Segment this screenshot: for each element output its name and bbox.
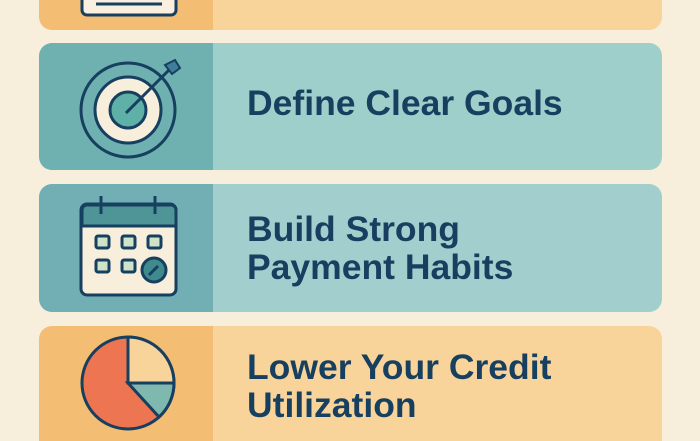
panel: payment habits bbox=[39, 184, 662, 312]
icon: document bbox=[80, 0, 178, 16]
icon: target bbox=[80, 58, 182, 158]
icon: pie chart bbox=[80, 336, 176, 430]
heading: Build Strong bbox=[247, 209, 460, 249]
panel: credit utilization bbox=[39, 326, 662, 441]
heading bbox=[247, 209, 513, 287]
heading bbox=[247, 347, 551, 425]
icon: calendar bbox=[80, 196, 178, 296]
panel: top card (partial) bbox=[39, 0, 662, 30]
heading: Payment Habits bbox=[247, 247, 513, 287]
panel: define clear goals bbox=[39, 43, 662, 170]
heading: Define Clear Goals bbox=[247, 83, 563, 123]
heading: Utilization bbox=[247, 385, 417, 425]
heading: Lower Your Credit bbox=[247, 347, 551, 387]
